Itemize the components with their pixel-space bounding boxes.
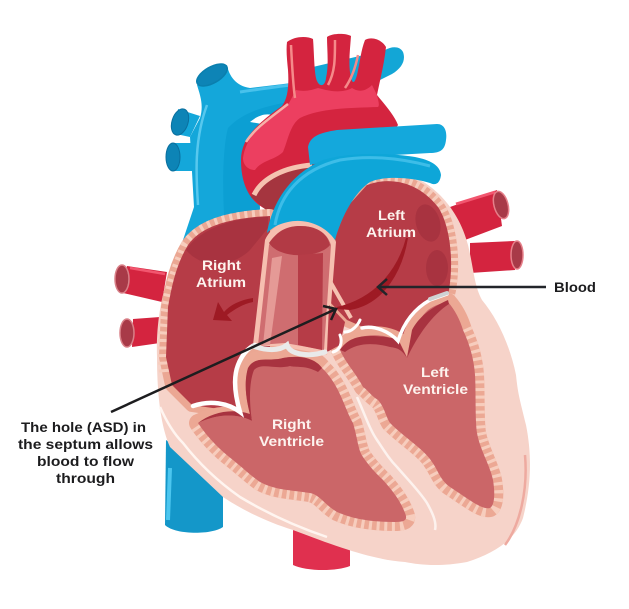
icon: gap between vessels (250, 114, 272, 124)
icon: right heart valve (193, 335, 341, 412)
icon: left pulmonary veins (115, 265, 167, 347)
label: Left Atrium: Atrium (366, 224, 416, 240)
arrow: blood label (378, 279, 546, 295)
label: hole description: the septum allows (18, 436, 153, 452)
arrow: hole label (111, 306, 336, 412)
panel: central blood vessel (253, 220, 336, 355)
label: Left Ventricle: Left (421, 364, 449, 380)
label: Right Ventricle (259, 416, 324, 449)
label: Right Atrium: Atrium (196, 274, 246, 290)
panel: right ventricle (198, 357, 406, 522)
icon: upper pulmonary artery (308, 124, 446, 165)
label: Left Ventricle: Ventricle (403, 381, 468, 397)
icon: outer right shading (505, 455, 526, 545)
label: hole description: through (56, 470, 115, 486)
icon: pale septal strip (331, 283, 351, 318)
label: hole description: The hole (ASD) in (21, 419, 146, 435)
label: Left Atrium: Left (378, 207, 405, 223)
panel: left atrium (328, 181, 451, 343)
icon: outer wall highlight (160, 407, 327, 537)
label: hole description (18, 419, 153, 486)
label: Blood: Blood (554, 280, 596, 295)
panel: left ventricle (340, 300, 494, 508)
icon: white highlight on septum (357, 397, 435, 530)
icon: blood flow arrow through hole (213, 238, 407, 321)
label: Right Atrium: Right (202, 257, 241, 273)
label: Right Ventricle: Right (272, 416, 311, 432)
icon: left heart valve (345, 293, 447, 341)
label: Left Atrium (366, 207, 416, 240)
panel: right atrium (165, 216, 270, 412)
icon: lower septal region (327, 305, 345, 352)
icon: artery arch highlight (275, 158, 430, 225)
icon: inferior vena cava (165, 440, 223, 533)
label: Right Ventricle: Ventricle (259, 433, 324, 449)
panel: heart outer wall (157, 172, 530, 565)
label: Right Atrium (196, 257, 246, 290)
label: hole description: blood to flow (37, 453, 134, 469)
icon: aorta (241, 34, 398, 220)
icon: right pulmonary veins (450, 190, 523, 273)
icon: aorta section ring (251, 163, 330, 225)
icon: superior vena cava (166, 47, 404, 270)
icon: lower red vessel (293, 530, 350, 570)
label: Left Ventricle (403, 364, 468, 397)
icon: pulmonary artery arch (267, 154, 441, 240)
